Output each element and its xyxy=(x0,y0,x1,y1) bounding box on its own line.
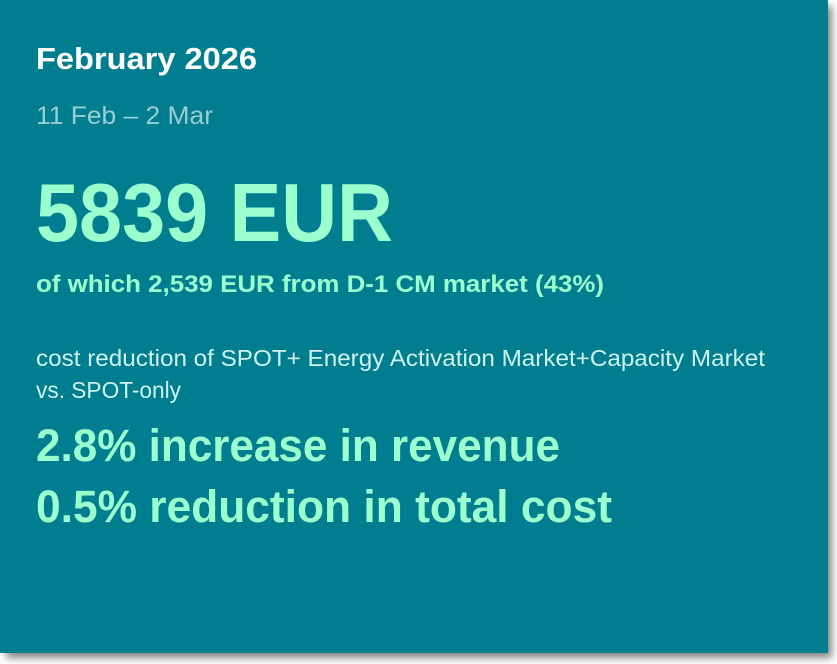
big number: total EUR: 5839 EUR xyxy=(36,166,393,259)
text: description line 2: vs. SPOT-only xyxy=(36,377,181,403)
heading: month: February 2026 xyxy=(36,41,257,76)
text: CM market share: of which 2,539 EUR from D-1 CM market (43%) xyxy=(36,271,604,298)
metric: revenue increase: 2.8% increase in revenue xyxy=(36,420,560,471)
text: description line 1: cost reduction of SPOT+ Energy Activation Market+Capacity Market xyxy=(36,345,766,371)
text: date range: 11 Feb – 2 Mar xyxy=(36,102,213,130)
metric: cost reduction: 0.5% reduction in total cost xyxy=(36,481,612,532)
